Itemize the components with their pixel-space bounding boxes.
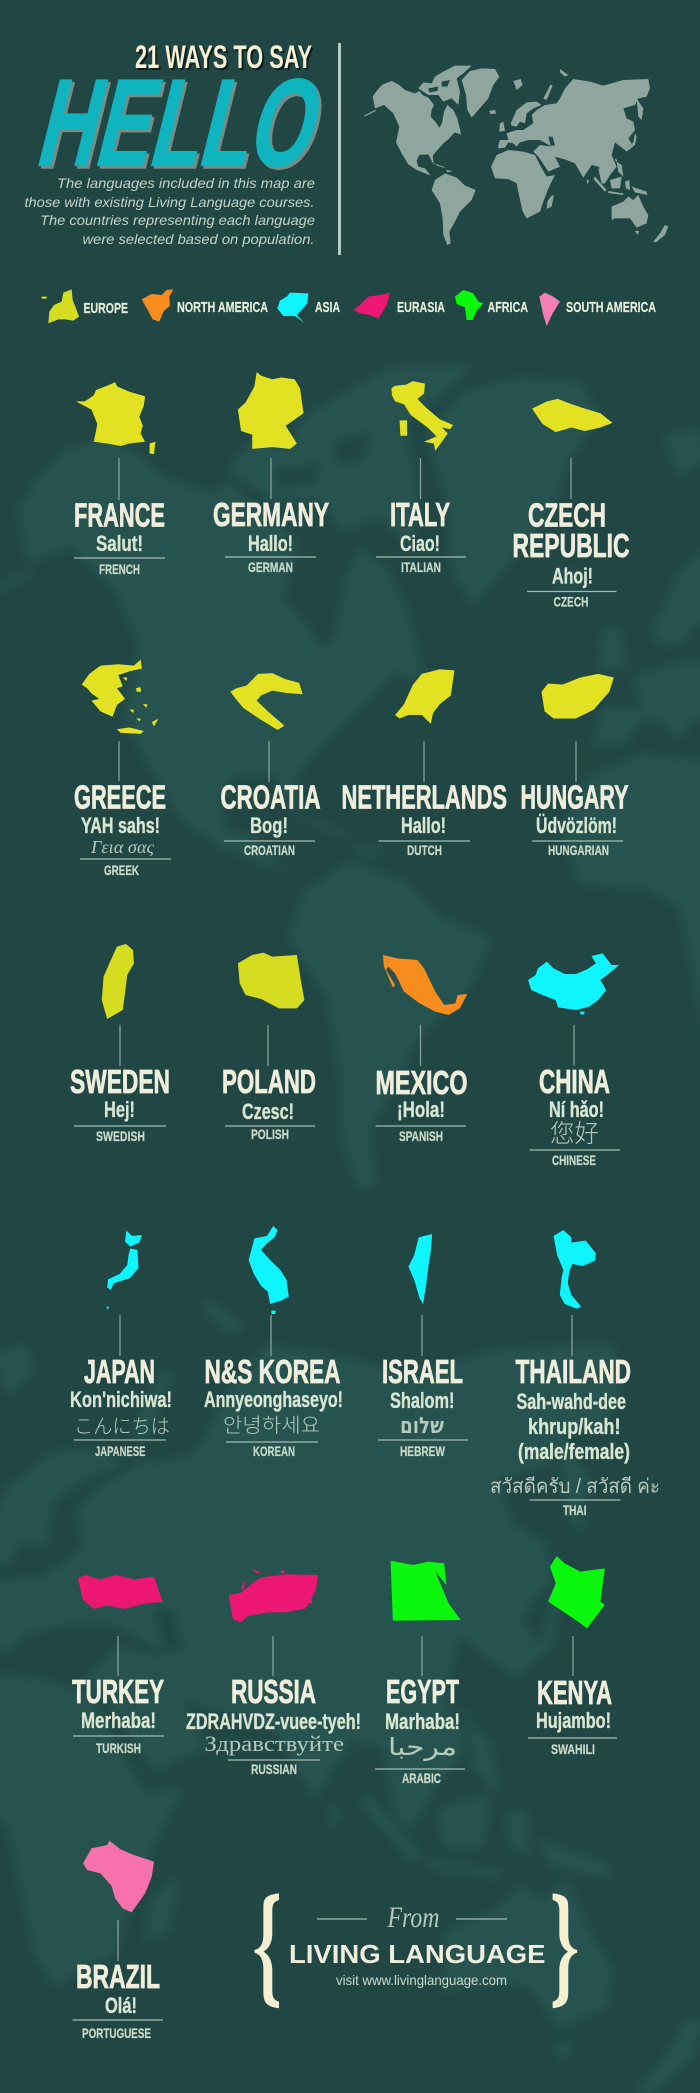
icon: Russia	[229, 1568, 318, 1622]
name: Czech Republic	[512, 498, 630, 565]
icon: Israel	[408, 1234, 432, 1304]
greeting: Ní hǎo!	[549, 1097, 604, 1122]
legend item: Africa	[455, 290, 528, 320]
language: PORTUGUESE	[82, 2025, 151, 2041]
greeting: Olá!	[105, 1993, 137, 2018]
legend item: North America: NORTH AMERICA	[177, 299, 268, 316]
legend item: South America: SOUTH AMERICA	[566, 299, 656, 316]
name: Czech Republic: CZECH	[528, 498, 606, 534]
icon: Brazil	[83, 1841, 154, 1912]
language: GERMAN	[248, 559, 293, 575]
header	[24, 39, 668, 255]
name: Korea: N&S KOREA	[204, 1354, 340, 1391]
native script: สวัสดีครับ / สวัสดี ค่ะ	[490, 1476, 660, 1498]
greeting: Shalom!	[390, 1388, 454, 1413]
name: Netherlands: NETHERLANDS	[342, 780, 507, 816]
legend item: North America	[142, 289, 268, 322]
language: SPANISH	[399, 1128, 443, 1144]
footer credit	[254, 1893, 577, 2008]
country: Netherlands	[342, 669, 507, 858]
country: Mexico	[376, 955, 468, 1144]
heading: 21 ways to say: 21 WAYS TO SAY	[135, 39, 312, 75]
country: Israel	[378, 1234, 468, 1459]
name: Turkey: TURKEY	[72, 1674, 164, 1711]
country: Thailand	[490, 1230, 660, 1518]
name: Brazil: BRAZIL	[76, 1959, 160, 1996]
name: Greece: GREECE	[74, 780, 166, 816]
language: GREEK	[104, 862, 139, 878]
intro text: The countries representing each language	[40, 212, 315, 228]
greeting: ZDRAHVDZ-vuee-tyeh!	[186, 1709, 361, 1734]
name: Mexico: MEXICO	[376, 1065, 468, 1102]
country: Egypt	[375, 1561, 465, 1786]
name: Japan: JAPAN	[84, 1354, 155, 1391]
brand name: LIVING LANGUAGE	[289, 1939, 546, 1969]
country: Turkey	[72, 1575, 164, 1756]
country: Croatia	[220, 673, 320, 858]
language: TURKISH	[96, 1740, 141, 1756]
background: faint world map, lower	[0, 1283, 700, 2093]
language: SWAHILI	[551, 1741, 595, 1757]
greeting: Hallo!	[248, 531, 293, 556]
name: France: FRANCE	[74, 498, 165, 534]
icon: Kenya	[548, 1556, 605, 1628]
legend item: Asia	[277, 293, 340, 323]
name: Hungary: HUNGARY	[520, 780, 628, 816]
language: JAPANESE	[95, 1443, 146, 1459]
title: Hello: HELLO	[27, 53, 336, 192]
icon: China	[528, 953, 619, 1014]
language: DUTCH	[407, 842, 442, 858]
greeting	[516, 1389, 630, 1464]
country: Germany	[213, 372, 329, 575]
name: Germany: GERMANY	[213, 497, 329, 534]
world map	[364, 66, 668, 245]
greeting: Annyeonghaseyo!	[204, 1387, 343, 1412]
greeting: Üdvözlöm!	[536, 813, 617, 838]
legend	[42, 289, 656, 326]
legend item: Eurasia	[353, 293, 445, 318]
icon: Greece	[82, 660, 158, 734]
icon: Korea	[249, 1226, 289, 1314]
language: ARABIC	[402, 1770, 441, 1786]
icon: Czech Republic	[532, 399, 612, 432]
name: Czech Republic: REPUBLIC	[512, 528, 630, 565]
legend item: Africa: AFRICA	[488, 299, 528, 316]
icon: Hungary	[541, 674, 614, 719]
icon: Netherlands	[395, 669, 454, 724]
country: Hungary	[520, 674, 628, 858]
greeting: Merhaba!	[81, 1708, 156, 1733]
intro text	[24, 175, 315, 247]
right brace	[553, 1893, 577, 2008]
language: POLISH	[251, 1126, 289, 1142]
greeting: khrup/kah!	[528, 1414, 620, 1439]
icon: Japan	[106, 1231, 142, 1310]
country: Brazil	[72, 1841, 163, 2041]
greeting: ¡Hola!	[397, 1097, 445, 1122]
name: Kenya: KENYA	[537, 1675, 612, 1712]
language: CHINESE	[552, 1152, 596, 1168]
country: North and South Korea	[204, 1226, 343, 1459]
language: ITALIAN	[401, 559, 441, 575]
name: China: CHINA	[539, 1064, 610, 1101]
legend item: South America	[539, 293, 656, 326]
language: KOREAN	[253, 1443, 295, 1459]
icon: Thailand	[554, 1230, 596, 1309]
language: SWEDISH	[96, 1128, 145, 1144]
native script: Здравствуйте	[204, 1731, 344, 1756]
greeting: Czesc!	[242, 1099, 294, 1124]
heading: 21 ways to say: 21 WAYS TO SAY	[137, 41, 314, 77]
name: Egypt: EGYPT	[386, 1674, 459, 1711]
greeting: (male/female)	[518, 1439, 630, 1464]
name: Israel: ISRAEL	[382, 1354, 463, 1391]
native script: こんにちは	[74, 1410, 170, 1439]
greeting: Marhaba!	[385, 1709, 460, 1734]
language: RUSSIAN	[251, 1761, 297, 1777]
icon: Egypt	[391, 1561, 461, 1621]
country: Greece	[74, 660, 171, 878]
language: HUNGARIAN	[548, 842, 609, 858]
title: Hello: HELLO	[29, 56, 339, 195]
greeting: Hujambo!	[536, 1708, 611, 1733]
native script: 안녕하세요	[223, 1409, 320, 1438]
native script: 您好	[550, 1114, 599, 1150]
country: Poland	[222, 953, 316, 1142]
language: CZECH	[554, 594, 588, 610]
country: Japan	[70, 1231, 172, 1459]
language: CROATIAN	[244, 842, 295, 858]
country: Russia	[186, 1568, 361, 1777]
country: Kenya	[528, 1556, 617, 1757]
country: China	[528, 953, 620, 1168]
greeting: Hallo!	[401, 813, 446, 838]
language: FRENCH	[99, 561, 140, 577]
legend item: Asia: ASIA	[315, 299, 340, 316]
greeting: YAH sahs!	[81, 813, 160, 838]
intro text: those with existing Living Language courses.	[24, 194, 314, 210]
intro text: The languages included in this map are	[57, 175, 315, 191]
name: Poland: POLAND	[222, 1064, 316, 1101]
icon: Croatia	[230, 673, 303, 730]
icon: Turkey	[78, 1575, 163, 1609]
icon: Sweden	[102, 944, 134, 1019]
icon: Poland	[238, 953, 304, 1008]
icon: France	[76, 382, 155, 454]
greeting: Bog!	[250, 813, 288, 838]
country: Czech Republic	[512, 399, 630, 610]
greeting: Salut!	[96, 531, 143, 556]
from: From	[387, 1901, 440, 1934]
greeting: Sah-wahd-dee	[516, 1389, 626, 1414]
country: France	[74, 382, 165, 577]
country: Sweden	[70, 944, 170, 1144]
name: Sweden: SWEDEN	[70, 1064, 170, 1101]
icon: Germany	[238, 372, 304, 449]
name: Italy: ITALY	[390, 497, 450, 534]
icon: Italy	[391, 381, 453, 451]
name: Thailand: THAILAND	[516, 1354, 631, 1391]
greeting: Hej!	[104, 1097, 135, 1122]
name: Croatia: CROATIA	[220, 780, 320, 816]
greeting: Ahoj!	[552, 564, 593, 588]
language: HEBREW	[400, 1443, 446, 1459]
website: visit www.livinglanguage.com	[336, 1972, 507, 1988]
background: faint world map, upper	[0, 366, 700, 1191]
heading: 21 ways to say	[135, 39, 314, 77]
legend item: Eurasia: EURASIA	[397, 299, 445, 316]
name: Russia: RUSSIA	[231, 1674, 316, 1711]
native script: Γεια σας	[90, 837, 155, 857]
intro text: were selected based on population.	[82, 231, 314, 247]
left brace	[254, 1893, 279, 2008]
title: Hello	[27, 53, 339, 195]
greeting: Kon'nichiwa!	[70, 1387, 172, 1412]
icon: Mexico	[383, 955, 467, 1015]
native script: مرحبا	[388, 1733, 457, 1761]
legend item: Europe	[42, 289, 128, 323]
legend item: Europe: EUROPE	[84, 300, 128, 317]
language: THAI	[563, 1502, 586, 1518]
native script: שלום	[400, 1414, 444, 1439]
greeting: Ciao!	[400, 531, 440, 556]
country: Italy	[376, 381, 466, 575]
